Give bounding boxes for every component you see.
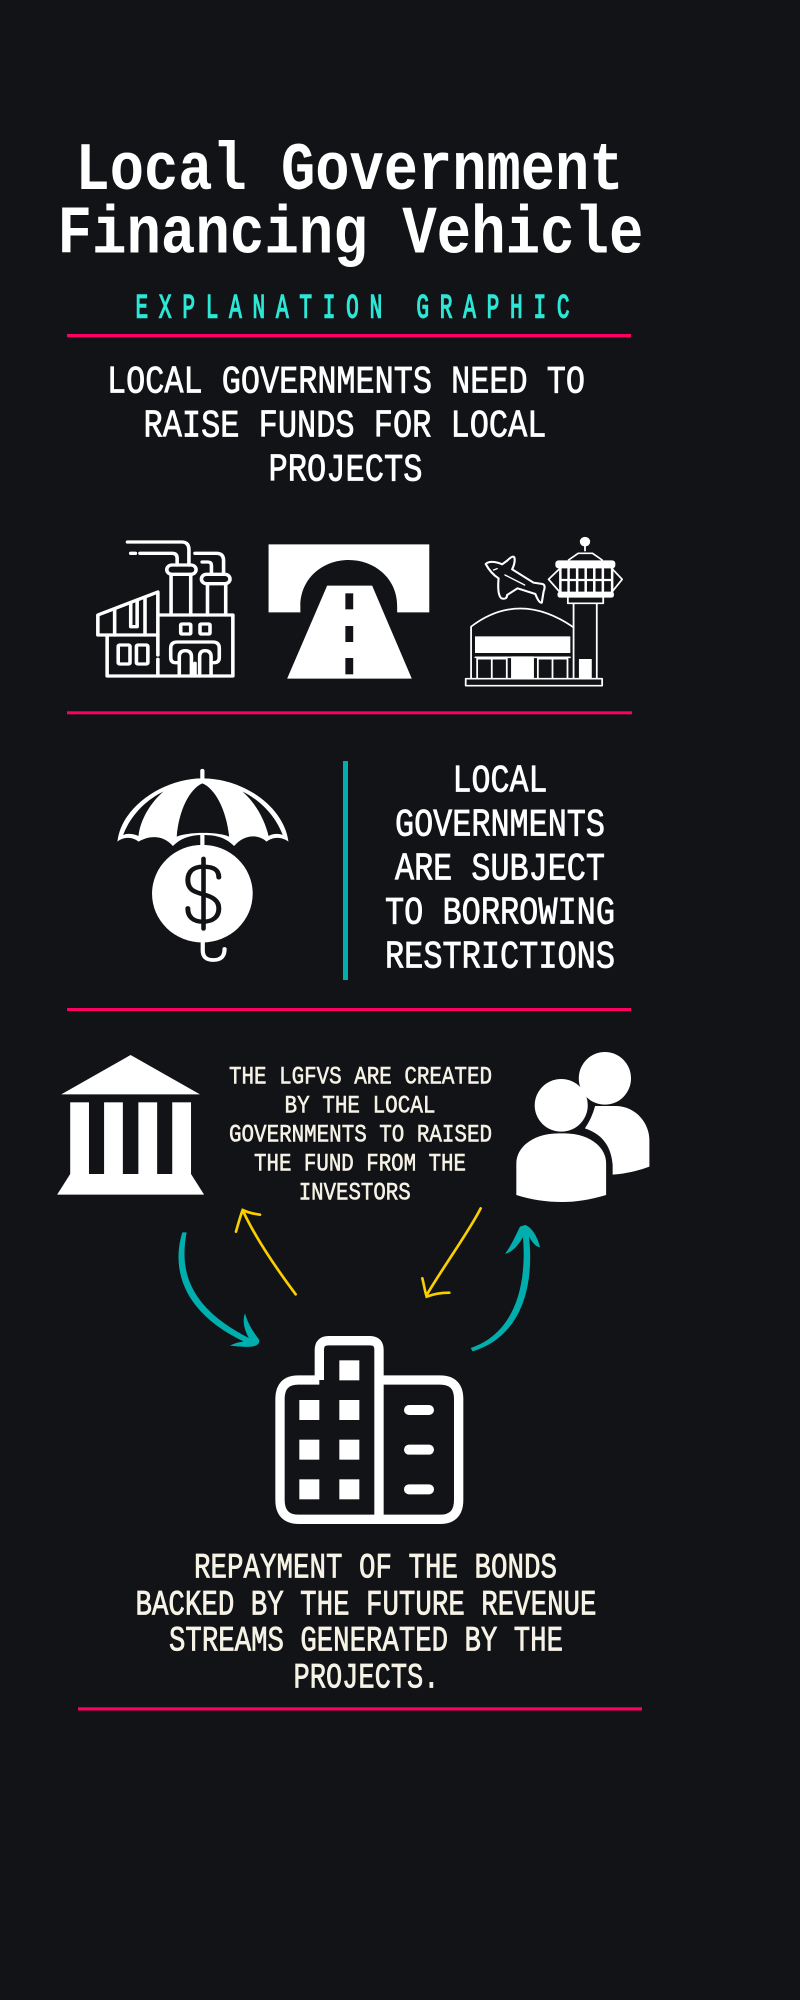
- text block: borrowing restrictions: ARE SUBJECT: [395, 847, 605, 891]
- arrow: teal right: [471, 1225, 540, 1351]
- icon: road tunnel: [269, 544, 429, 679]
- text block: need to raise funds: RAISE FUNDS FOR LOCAL: [144, 405, 546, 449]
- text block: borrowing restrictions: RESTRICTIONS: [385, 935, 615, 979]
- icon: factory: [98, 542, 233, 676]
- arrow: yellow right: [422, 1208, 481, 1297]
- icon: government bank: [57, 1055, 204, 1195]
- text block: borrowing restrictions: GOVERNMENTS: [395, 804, 605, 848]
- text block: LGFVs created: THE FUND FROM THE: [254, 1149, 466, 1178]
- text block: need to raise funds: [107, 361, 585, 493]
- text block: LGFVs created: THE LGFVS ARE CREATED: [229, 1062, 492, 1091]
- text block: repayment of the bonds: [136, 1548, 596, 1698]
- icon: office building: [280, 1341, 459, 1519]
- arrows and building group: [178, 1208, 540, 1519]
- text block: repayment of the bonds: REPAYMENT OF THE BONDS: [194, 1548, 557, 1588]
- divider 3: [67, 1008, 631, 1011]
- text block: LGFVs created: GOVERNMENTS TO RAISED: [229, 1120, 492, 1149]
- text block: borrowing restrictions: [385, 760, 615, 979]
- divider 4: [78, 1707, 642, 1710]
- arrow: teal left: [178, 1232, 259, 1347]
- text block: repayment of the bonds: STREAMS GENERATED BY THE: [169, 1622, 563, 1662]
- icon: investors: [516, 1052, 649, 1202]
- text block: borrowing restrictions: LOCAL: [452, 760, 548, 804]
- arrow: yellow left: [236, 1210, 296, 1294]
- text block: need to raise funds: LOCAL GOVERNMENTS NEED TO: [107, 361, 585, 405]
- subtitle: EXPLANATION GRAPHIC: [135, 290, 570, 329]
- icon: airport: [466, 538, 622, 686]
- text block: need to raise funds: PROJECTS: [268, 449, 422, 493]
- text block: LGFVs created: INVESTORS: [299, 1178, 411, 1207]
- text block: repayment of the bonds: BACKED BY THE FUTURE REVENUE: [136, 1585, 596, 1625]
- divider 2: [67, 711, 632, 714]
- divider 1: [67, 334, 631, 337]
- text block: LGFVs created: [229, 1062, 492, 1207]
- vertical teal bar: [343, 761, 348, 980]
- title: [58, 133, 644, 274]
- title: Local Government: [76, 133, 624, 210]
- text block: borrowing restrictions: TO BORROWING: [385, 891, 615, 935]
- icon: umbrella with dollar coin: [117, 771, 288, 960]
- text block: repayment of the bonds: PROJECTS.: [294, 1658, 440, 1698]
- text block: LGFVs created: BY THE LOCAL: [284, 1091, 436, 1120]
- title: Financing Vehicle: [58, 197, 644, 274]
